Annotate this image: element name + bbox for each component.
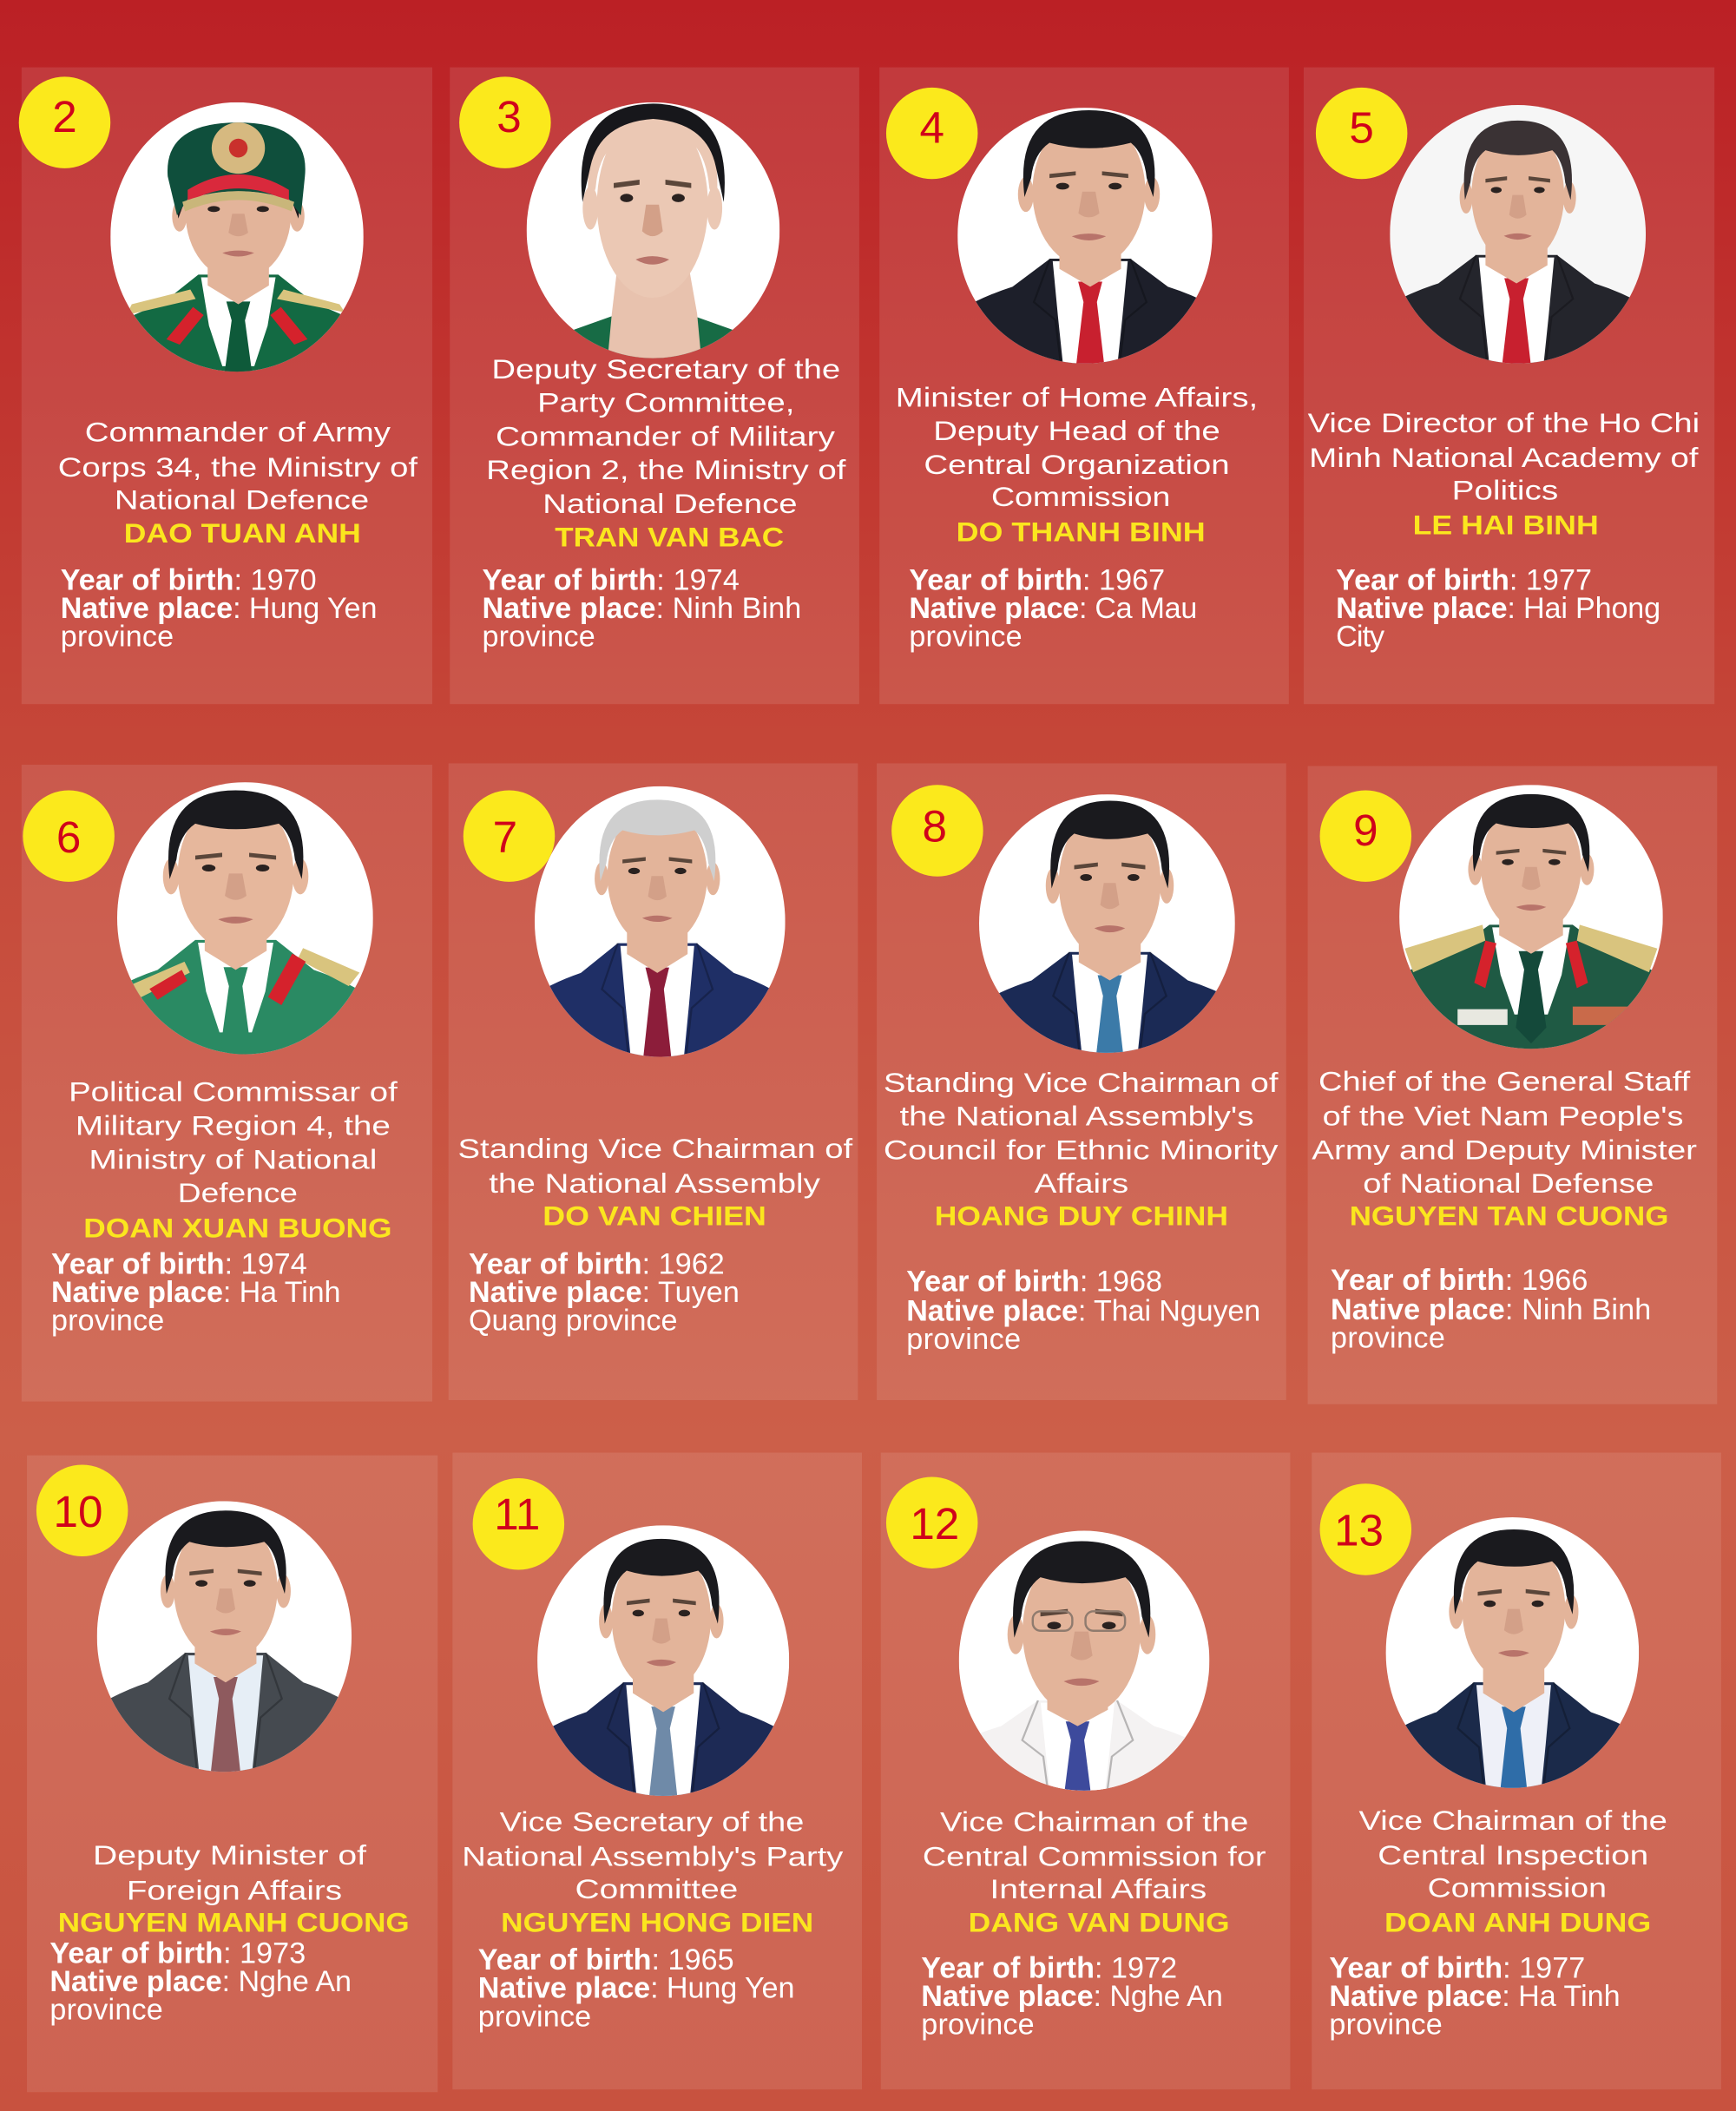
name: DANG VAN DUNG: [969, 1908, 1230, 1938]
role text: Deputy Secretary of the: [491, 354, 840, 385]
role text: Minh National Academy of: [1309, 443, 1699, 473]
name: HOANG DUY CHINH: [935, 1200, 1228, 1231]
role text: Affairs: [1035, 1168, 1128, 1199]
details: Year of birth: 1968: [906, 1265, 1162, 1298]
number badge 2: [19, 76, 110, 168]
role text: Central Organization: [924, 450, 1230, 480]
details: [61, 563, 377, 653]
panel: card 4: [879, 68, 1289, 704]
role text: Internal Affairs: [990, 1874, 1207, 1904]
role text: [923, 1806, 1266, 1904]
panel: card 8: [877, 763, 1286, 1400]
details: province: [478, 2000, 591, 2033]
details: [51, 1247, 341, 1337]
details: province: [482, 620, 595, 653]
panel: card 7: [449, 763, 858, 1400]
details: province: [921, 2009, 1035, 2042]
role text: the National Assembly: [489, 1168, 821, 1199]
details: Native place: Ninh Binh: [1331, 1293, 1651, 1326]
name: DO VAN CHIEN: [542, 1200, 766, 1231]
details: Year of birth: 1974: [482, 563, 740, 596]
portrait: Hoang Duy Chinh: [979, 794, 1235, 1053]
role text: Central Commission for: [923, 1842, 1266, 1872]
number badge 9: [1320, 790, 1411, 882]
details: Native place: Ha Tinh: [1329, 1980, 1621, 2013]
role text: Foreign Affairs: [127, 1875, 342, 1905]
role text: [884, 1068, 1279, 1199]
role text: Committee: [575, 1874, 738, 1904]
details: province: [49, 1994, 163, 2027]
details: Native place: Nghe An: [49, 1965, 352, 1998]
role text: Region 2, the Ministry of: [486, 455, 846, 485]
role text: [486, 354, 846, 519]
number badge 10: 10: [54, 1487, 102, 1536]
role text: Corps 34, the Ministry of: [58, 452, 418, 483]
panel: card 12: [881, 1453, 1290, 2089]
role text: [1308, 408, 1700, 505]
portrait: Doan Anh Dung: [1385, 1517, 1639, 1788]
name: NGUYEN HONG DIEN: [501, 1908, 813, 1938]
details: Year of birth: 1970: [61, 563, 317, 596]
role text: [1359, 1805, 1667, 1903]
portrait: Nguyen Tan Cuong: [1399, 785, 1663, 1049]
number badge 10: [36, 1465, 128, 1556]
details: Year of birth: 1977: [1329, 1951, 1585, 1984]
portrait: Dang Van Dung: [958, 1531, 1210, 1791]
number badge 12: [886, 1476, 977, 1568]
role text: Vice Chairman of the: [1359, 1805, 1667, 1836]
number badge 5: 5: [1349, 102, 1374, 152]
portrait: Le Hai Binh: [1390, 105, 1646, 364]
role text: Chief of the General Staff: [1318, 1066, 1691, 1096]
name: DAO TUAN ANH: [124, 518, 361, 549]
panel: card 9: [1308, 766, 1717, 1404]
details: [921, 1951, 1223, 2042]
name: DOAN XUAN BUONG: [83, 1213, 392, 1243]
role text: [462, 1806, 844, 1904]
number badge 3: [459, 76, 551, 168]
name: NGUYEN MANH CUONG: [58, 1908, 410, 1938]
details: Year of birth: 1974: [51, 1247, 307, 1280]
details: Quang province: [469, 1304, 677, 1337]
details: Year of birth: 1972: [921, 1951, 1177, 1984]
details: [469, 1247, 740, 1337]
role text: of the Viet Nam People's: [1323, 1102, 1683, 1132]
portrait: Nguyen Hong Dien: [537, 1525, 790, 1796]
portrait: Nguyen Manh Cuong: [97, 1501, 352, 1772]
number badge 11: 11: [494, 1490, 540, 1539]
details: Year of birth: 1967: [909, 563, 1165, 596]
name: DO THANH BINH: [957, 517, 1206, 548]
name: NGUYEN TAN CUONG: [1350, 1200, 1668, 1231]
details: province: [909, 620, 1023, 653]
details: province: [51, 1304, 164, 1337]
name: LE HAI BINH: [1413, 510, 1599, 541]
portrait: Do Van Chien: [535, 786, 785, 1057]
number badge 4: [886, 88, 977, 179]
role text: Commission: [1428, 1872, 1607, 1903]
details: Year of birth: 1966: [1331, 1264, 1588, 1297]
number badge 7: [464, 790, 555, 882]
details: Native place: Nghe An: [921, 1980, 1223, 2013]
details: Native place: Tuyen: [469, 1276, 740, 1309]
role text: Standing Vice Chairman of: [884, 1068, 1279, 1098]
details: Year of birth: 1962: [469, 1247, 725, 1280]
role text: the National Assembly's: [899, 1102, 1254, 1132]
panel: card 2: [19, 68, 432, 704]
details: Native place: Ninh Binh: [482, 592, 801, 625]
details: [49, 1937, 352, 2027]
role text: Ministry of National: [89, 1144, 377, 1174]
details: [482, 563, 801, 653]
details: province: [61, 620, 174, 653]
role text: Commission: [991, 482, 1170, 512]
panel: card 10: [27, 1456, 437, 2092]
details: [478, 1943, 794, 2033]
number badge 6: 6: [56, 812, 81, 862]
number badge 5: [1316, 88, 1407, 179]
role text: Central Inspection: [1378, 1840, 1648, 1871]
number badge 13: 13: [1334, 1506, 1384, 1555]
number badge 8: [891, 785, 983, 877]
details: Native place: Thai Nguyen: [906, 1295, 1260, 1328]
role text: of National Defense: [1363, 1168, 1654, 1199]
role text: Politics: [1452, 475, 1558, 505]
number badge 9: 9: [1353, 806, 1378, 855]
details: City: [1336, 620, 1384, 653]
details: Native place: Hung Yen: [478, 1972, 794, 2005]
role text: [896, 382, 1258, 512]
role text: Party Committee,: [537, 388, 794, 418]
number badge 13: [1320, 1483, 1411, 1575]
details: [909, 563, 1197, 653]
details: Year of birth: 1977: [1336, 563, 1592, 596]
number badge 3: 3: [496, 92, 522, 141]
number badge 2: 2: [52, 92, 77, 141]
details: Native place: Ca Mau: [909, 592, 1197, 625]
portrait: Doan Xuan Buong: [117, 782, 373, 1054]
portrait: Tran Van Bac: [527, 102, 779, 371]
role text: Commander of Military: [496, 421, 836, 451]
details: [1329, 1951, 1621, 2042]
role text: Standing Vice Chairman of: [458, 1134, 853, 1164]
details: [1336, 563, 1660, 653]
details: Year of birth: 1973: [49, 1937, 306, 1970]
portrait: Dao Tuan Anh: [110, 102, 364, 372]
details: province: [906, 1323, 1021, 1356]
role text: Minister of Home Affairs,: [896, 382, 1258, 412]
panel: card 5: [1304, 68, 1714, 704]
role text: Army and Deputy Minister: [1312, 1134, 1697, 1165]
number badge 8: 8: [923, 801, 947, 851]
role text: Vice Secretary of the: [500, 1806, 804, 1837]
role text: Vice Director of the Ho Chi: [1308, 408, 1700, 438]
role text: Military Region 4, the: [76, 1111, 391, 1141]
panel: card 13: [1312, 1453, 1721, 2089]
role text: Political Commissar of: [69, 1077, 398, 1108]
role text: [458, 1134, 853, 1199]
details: province: [1329, 2009, 1443, 2042]
role text: National Defence: [542, 489, 798, 519]
number badge 12: 12: [910, 1499, 959, 1549]
role text: [93, 1840, 367, 1905]
name: TRAN VAN BAC: [555, 523, 784, 553]
details: province: [1331, 1322, 1445, 1355]
details: Native place: Hung Yen: [61, 592, 377, 625]
number badge 6: [23, 790, 115, 882]
role text: Defence: [178, 1178, 298, 1208]
details: Native place: Hai Phong: [1336, 592, 1660, 625]
role text: [1312, 1066, 1697, 1199]
role text: Council for Ethnic Minority: [884, 1134, 1279, 1165]
details: Native place: Ha Tinh: [51, 1276, 341, 1309]
name: DOAN ANH DUNG: [1384, 1908, 1651, 1938]
role text: Deputy Minister of: [93, 1840, 367, 1871]
role text: Deputy Head of the: [933, 416, 1220, 446]
role text: Vice Chairman of the: [940, 1806, 1248, 1837]
details: [906, 1265, 1260, 1356]
role text: National Defence: [115, 484, 369, 515]
number badge 7: 7: [493, 812, 517, 862]
number badge 4: 4: [919, 102, 944, 152]
panel: card 11: [452, 1453, 862, 2089]
number badge 11: [473, 1478, 564, 1569]
role text: Commander of Army: [85, 418, 391, 448]
details: [1331, 1264, 1651, 1355]
panel: card 3: [450, 68, 859, 704]
role text: [69, 1077, 398, 1208]
details: Year of birth: 1965: [478, 1943, 734, 1976]
portrait: Do Thanh Binh: [957, 108, 1212, 364]
role text: National Assembly's Party: [462, 1842, 844, 1872]
panel: card 6: [22, 765, 432, 1402]
role text: [58, 418, 418, 515]
